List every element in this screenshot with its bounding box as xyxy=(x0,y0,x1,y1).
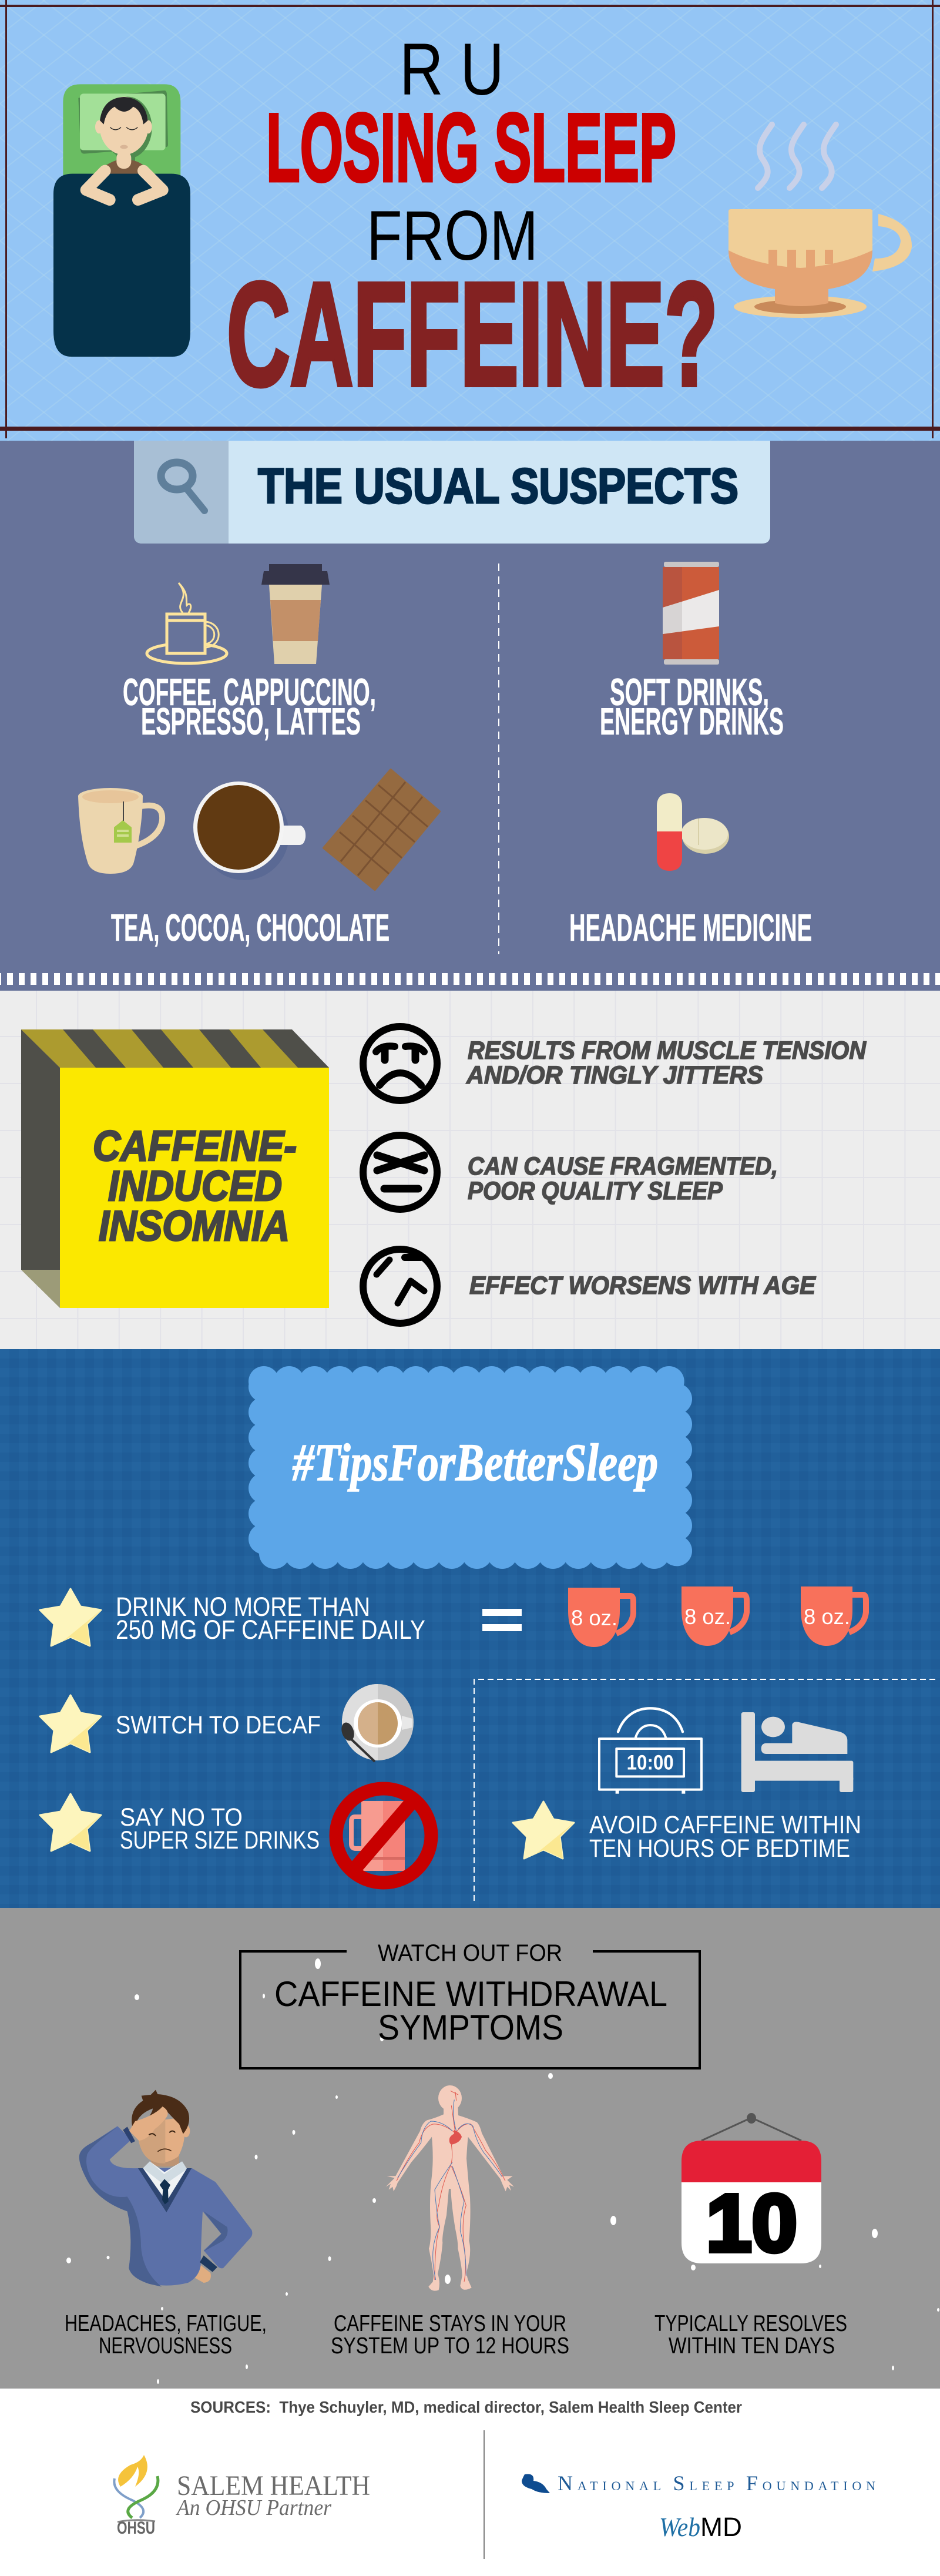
banner: the usual suspects heading xyxy=(134,441,770,544)
text: caffeine limit: 250 MG OF CAFFEINE DAILY xyxy=(116,1615,425,1645)
text: muscle tension xyxy=(466,1037,867,1089)
icon: no super size drink xyxy=(336,1789,431,1883)
logo: Salem Health: OHSU xyxy=(117,2518,155,2538)
caption: soft drinks: ENERGY DRINKS xyxy=(600,700,784,743)
logo: National Sleep Foundation: N ATIONAL S LEEP F OUNDATION xyxy=(558,2471,875,2495)
icon: 8 oz mug three xyxy=(801,1586,866,1646)
hazard box: INDUCED xyxy=(108,1163,282,1210)
text: fragmented sleep: POOR QUALITY SLEEP xyxy=(468,1177,723,1205)
icon: human circulatory system xyxy=(386,2085,514,2291)
icon: decaf cup top view xyxy=(340,1684,414,1762)
text: say no to super size drinks: SAY NO TO xyxy=(120,1803,243,1832)
caption: caffeine stays: SYSTEM UP TO 12 HOURS xyxy=(331,2333,569,2359)
icon: star xyxy=(40,1794,101,1851)
heading box: caffeine withdrawal symptoms: WATCH OUT FOR xyxy=(378,1940,562,1966)
caption: soft drinks: SOFT DRINKS, xyxy=(610,670,769,713)
icon: steaming coffee cup xyxy=(728,125,912,318)
hazard box: INSOMNIA xyxy=(99,1203,290,1250)
icon: person sleeping in bed xyxy=(53,84,190,357)
text: say no to super size drinks: SUPER SIZE DRINKS xyxy=(120,1826,320,1854)
text: caffeine limit: DRINK NO MORE THAN xyxy=(116,1592,370,1622)
caption: tea cocoa chocolate: TEA, COCOA, CHOCOLATE xyxy=(111,906,390,949)
icon: man with headache xyxy=(79,2090,252,2287)
icon: coffee cup line art xyxy=(147,583,227,663)
icon: cocoa cup top view xyxy=(193,781,306,880)
icon: star xyxy=(40,1695,101,1752)
text: switch to decaf: SWITCH TO DECAF xyxy=(116,1711,321,1739)
text: muscle tension: RESULTS FROM MUSCLE TENSION xyxy=(468,1037,867,1065)
text: fragmented sleep: CAN CAUSE FRAGMENTED, xyxy=(468,1152,778,1180)
logo: Salem Health xyxy=(114,2455,370,2538)
sources line: SOURCES: Thye Schuyler, MD, medical director, Salem Health Sleep Center xyxy=(190,2398,742,2416)
caption: caffeine stays: CAFFEINE STAYS IN YOUR xyxy=(334,2311,566,2336)
icon: aged face xyxy=(363,1249,437,1323)
caption: headaches: NERVOUSNESS xyxy=(99,2333,232,2359)
icon: chocolate bar xyxy=(324,770,439,890)
panel: header xyxy=(0,0,940,441)
icon: star xyxy=(513,1802,574,1859)
icon: alarm clock 10:00: 10:00 xyxy=(627,1752,674,1775)
title line: R U: R U xyxy=(400,29,504,110)
caption: headaches: HEADACHES, FATIGUE, xyxy=(65,2311,267,2336)
panel: the usual suspects xyxy=(0,441,940,991)
heading box: caffeine withdrawal symptoms: SYMPTOMS xyxy=(378,2008,563,2047)
text: say no to super size drinks xyxy=(120,1803,320,1854)
text: muscle tension: AND/OR TINGLY JITTERS xyxy=(466,1061,763,1089)
equals sign xyxy=(482,1609,522,1631)
logo: Salem Health: An OHSU Partner xyxy=(175,2496,331,2520)
text: avoid caffeine near bedtime: TEN HOURS OF BEDTIME xyxy=(589,1834,850,1863)
heading box: caffeine withdrawal symptoms: CAFFEINE WITHDRAWAL xyxy=(274,1974,667,2014)
icon: calendar showing 10: 10 xyxy=(706,2178,797,2269)
caption: typically resolves xyxy=(654,2311,847,2359)
caption: typically resolves: WITHIN TEN DAYS xyxy=(669,2333,835,2359)
text: effect worsens with age: EFFECT WORSENS WITH AGE xyxy=(469,1272,816,1300)
logo: WebMD: MD xyxy=(700,2512,742,2542)
caption: soft drinks xyxy=(600,670,784,743)
icon: takeaway coffee cup xyxy=(261,564,330,664)
caption: coffee types xyxy=(123,670,376,743)
text: fragmented sleep xyxy=(468,1152,778,1205)
icon: tea mug with tea bag xyxy=(78,788,162,874)
icon: 8 oz mug two xyxy=(682,1586,747,1646)
panel: tips for better sleep xyxy=(0,1349,940,1908)
icon: soda can xyxy=(663,562,719,665)
text: caffeine limit xyxy=(116,1592,425,1645)
icon: 8 oz mug one xyxy=(568,1588,633,1647)
logo: WebMD xyxy=(659,2512,742,2542)
icon: pills xyxy=(657,793,729,871)
logo: Salem Health: SALEM HEALTH xyxy=(177,2470,370,2501)
panel: caffeine withdrawal symptoms xyxy=(0,1908,940,2389)
caption: typically resolves: TYPICALLY RESOLVES xyxy=(654,2311,847,2336)
icon: frowning face xyxy=(363,1027,437,1101)
hazard box: CAFFEINE- xyxy=(93,1123,297,1170)
icon: fragmented sleep face xyxy=(363,1135,437,1209)
icon: person in bed xyxy=(741,1712,853,1792)
caption: caffeine stays xyxy=(331,2311,569,2359)
logo: WebMD: Web xyxy=(659,2513,700,2542)
panel: sources and logos xyxy=(0,2389,940,2576)
icon: calendar showing 10 xyxy=(682,2113,821,2269)
text: avoid caffeine near bedtime: AVOID CAFFEINE WITHIN xyxy=(589,1811,861,1839)
title line: FROM: FROM xyxy=(367,196,538,275)
cloud heading: tips for better sleep xyxy=(258,1378,682,1557)
cloud heading: tips for better sleep: #TipsForBetterSleep xyxy=(292,1434,658,1492)
hazard box xyxy=(21,1029,329,1308)
text: avoid caffeine near bedtime xyxy=(589,1811,861,1863)
caption: headaches xyxy=(65,2311,267,2359)
panel: caffeine-induced insomnia xyxy=(0,991,940,1349)
icon: star xyxy=(40,1589,101,1646)
icon: alarm clock 10:00 xyxy=(599,1708,701,1794)
caption: coffee types: COFFEE, CAPPUCCINO, xyxy=(123,670,376,713)
caption: coffee types: ESPRESSO, LATTES xyxy=(141,700,361,743)
banner: the usual suspects heading: THE USUAL SUSPECTS xyxy=(258,458,738,514)
heading box: caffeine withdrawal symptoms xyxy=(240,1940,700,2068)
